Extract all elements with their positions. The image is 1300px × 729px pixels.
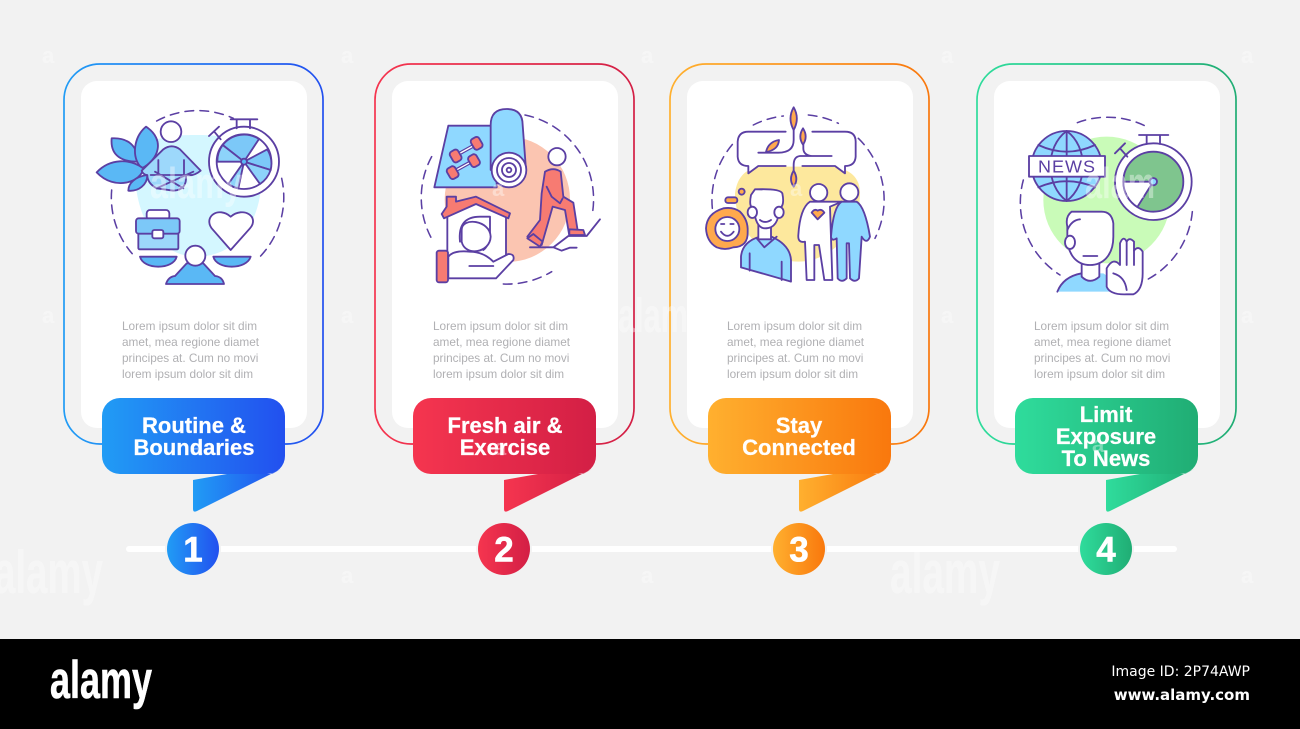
watermarks: alamy	[150, 159, 242, 208]
card outline	[670, 64, 929, 444]
watermarks: a	[494, 435, 507, 460]
body text: principes at. Cum no movi	[727, 351, 863, 365]
watermarks: a	[492, 176, 505, 201]
panel: fresh air and exercise	[375, 64, 634, 577]
watermarks: a	[1241, 43, 1254, 68]
body text: amet, mea regione diamet	[433, 335, 571, 349]
card inner	[392, 81, 618, 428]
callout tail	[504, 469, 592, 512]
icon: balance of routine	[97, 111, 284, 284]
site url: www.alamy.com	[1114, 686, 1250, 704]
step number: 1	[183, 530, 203, 570]
card inner	[994, 81, 1220, 428]
watermarks: a	[341, 563, 354, 588]
callout heading	[1015, 398, 1198, 474]
body text: Lorem ipsum dolor sit dim	[727, 319, 862, 333]
watermarks: a	[190, 435, 203, 460]
body text: amet, mea regione diamet	[727, 335, 865, 349]
icon: exercise and home	[421, 109, 600, 284]
watermarks: a	[790, 176, 803, 201]
watermarks: a	[1241, 563, 1254, 588]
watermarks: alam	[618, 290, 688, 343]
card inner	[81, 81, 307, 428]
watermarks: a	[1241, 303, 1254, 328]
watermarks: a	[641, 563, 654, 588]
callout tail	[193, 469, 281, 512]
step number: 2	[494, 530, 514, 570]
callout heading	[102, 398, 285, 474]
card outline	[977, 64, 1236, 444]
heading text: Limit	[1080, 402, 1133, 427]
news label: NEWS	[1038, 157, 1096, 177]
body text: lorem ipsum dolor sit dim	[727, 367, 858, 381]
footer logo: alamy	[50, 651, 152, 710]
watermarks: a	[42, 43, 55, 68]
icon: news and timer	[1020, 117, 1193, 294]
body text: principes at. Cum no movi	[122, 351, 258, 365]
body text: amet, mea regione diamet	[122, 335, 260, 349]
body text: Lorem ipsum dolor sit dim	[433, 319, 568, 333]
body text: amet, mea regione diamet	[1034, 335, 1172, 349]
watermarks: a	[341, 43, 354, 68]
heading text: Exercise	[460, 435, 550, 460]
watermarks: a	[941, 303, 954, 328]
card outline	[64, 64, 323, 444]
callout tail	[1106, 469, 1194, 512]
heading text: Boundaries	[133, 435, 255, 460]
body text: lorem ipsum dolor sit dim	[122, 367, 253, 381]
heading text: To News	[1062, 446, 1150, 471]
body text: Lorem ipsum dolor sit dim	[1034, 319, 1169, 333]
panel: stay connected	[670, 64, 929, 577]
panel: limit exposure to news	[977, 64, 1236, 577]
watermarks: a	[341, 303, 354, 328]
heading text: Stay	[776, 413, 823, 438]
card inner	[687, 81, 913, 428]
watermarks: a	[641, 43, 654, 68]
watermarks: a	[1092, 432, 1105, 457]
watermarks: alamy	[890, 539, 1000, 606]
card outline	[375, 64, 634, 444]
body text: lorem ipsum dolor sit dim	[1034, 367, 1165, 381]
step number: 3	[789, 530, 809, 570]
icon: people connecting	[706, 107, 884, 282]
callout heading	[708, 398, 891, 474]
heading text: Exposure	[1056, 424, 1156, 449]
body text: lorem ipsum dolor sit dim	[433, 367, 564, 381]
step number	[165, 521, 221, 577]
watermarks: alam	[1085, 159, 1155, 208]
callout heading	[413, 398, 596, 474]
body text: Lorem ipsum dolor sit dim	[122, 319, 257, 333]
step number	[1078, 521, 1134, 577]
watermarks: a	[941, 43, 954, 68]
panel: routine and boundaries	[64, 64, 323, 577]
step number	[771, 521, 827, 577]
heading text: Routine &	[142, 413, 246, 438]
watermarks: a	[42, 303, 55, 328]
heading text: Fresh air &	[448, 413, 563, 438]
footer bar	[0, 639, 1300, 729]
callout tail	[799, 469, 887, 512]
timeline line	[126, 546, 1177, 552]
step number	[476, 521, 532, 577]
body text: principes at. Cum no movi	[433, 351, 569, 365]
image id: Image ID: 2P74AWP	[1111, 664, 1250, 680]
step number: 4	[1096, 530, 1116, 570]
body text: principes at. Cum no movi	[1034, 351, 1170, 365]
heading text: Connected	[742, 435, 856, 460]
watermarks	[0, 43, 1254, 606]
